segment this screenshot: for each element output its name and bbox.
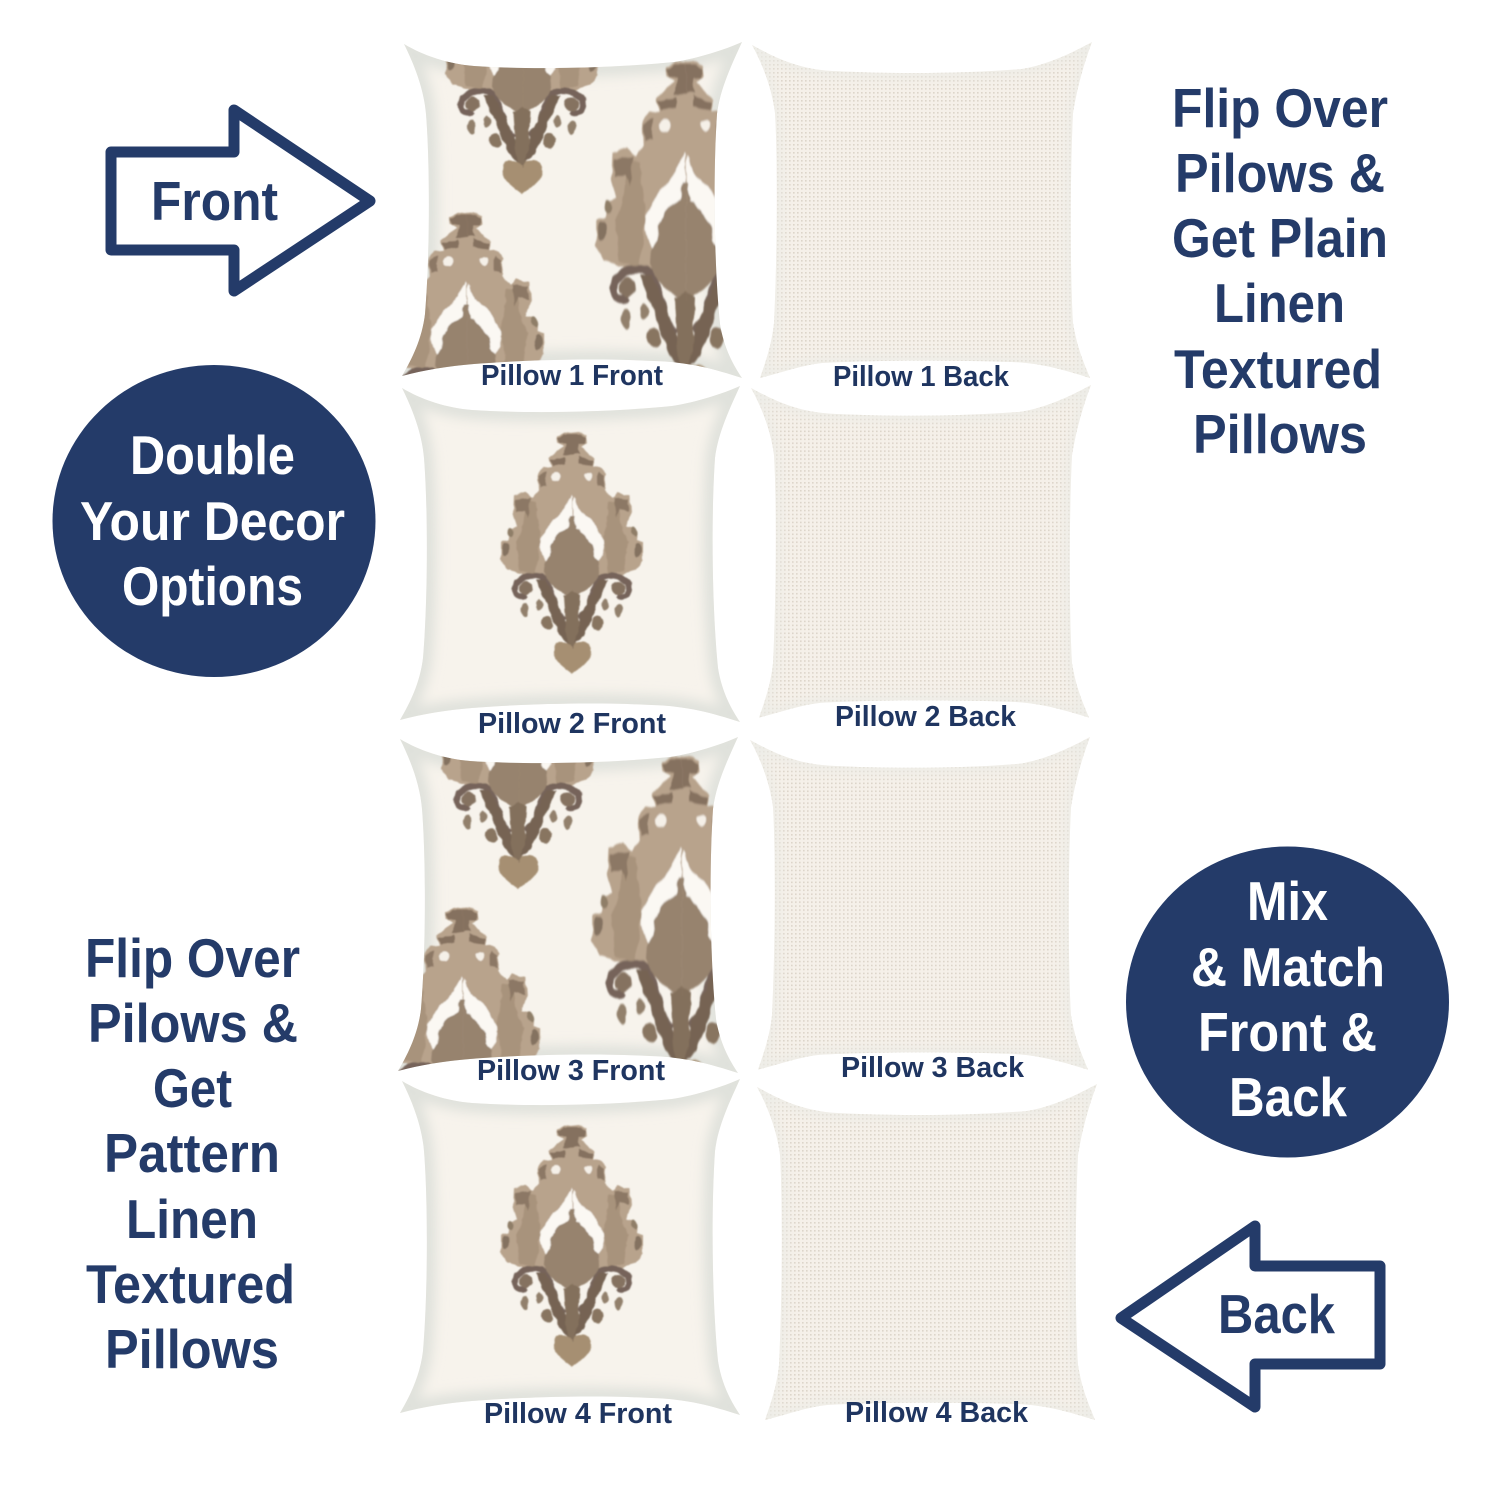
- label: pillow 3 back: Pillow 3 Back: [841, 1052, 1025, 1084]
- label: pillow 1 back: Pillow 1 Back: [833, 361, 1010, 393]
- badge: double your decor options: [52, 365, 376, 677]
- pillow 3 back: [750, 737, 1090, 1070]
- pillow 4 front: [400, 1079, 740, 1415]
- text block: flip over pattern: Textured: [86, 1253, 295, 1315]
- arrow: front: [111, 110, 370, 291]
- label: pillow 4 back: Pillow 4 Back: [845, 1397, 1029, 1429]
- label: pillow 3 front: Pillow 3 Front: [477, 1055, 665, 1087]
- badge: double your decor options: Your Decor: [80, 490, 345, 552]
- text block: flip over plain: Get Plain: [1172, 207, 1388, 269]
- badge: mix and match: & Match: [1191, 936, 1385, 998]
- pillow 3 front: [384, 635, 770, 1173]
- badge: mix and match: [1126, 846, 1449, 1158]
- text block: flip over plain: [1172, 77, 1388, 465]
- label: pillow 4 front: Pillow 4 Front: [484, 1398, 672, 1430]
- pillow 2 front: [400, 386, 740, 722]
- arrow label: front: Front: [151, 170, 278, 232]
- text block: flip over pattern: Flip Over: [85, 927, 300, 989]
- text block: flip over pattern: [85, 927, 300, 1380]
- badge: double your decor options: Options: [122, 555, 303, 617]
- pillow 2 back: [751, 385, 1091, 718]
- arrow label: back: Back: [1218, 1283, 1335, 1345]
- pillow 1 front: [388, 0, 774, 478]
- text block: flip over pattern: Get: [153, 1057, 232, 1119]
- badge: mix and match: Front &: [1198, 1001, 1377, 1063]
- arrow: back: [1121, 1226, 1380, 1407]
- text block: flip over plain: Pillows: [1193, 403, 1367, 465]
- text block: flip over plain: Flip Over: [1172, 77, 1388, 139]
- label: pillow 2 front: Pillow 2 Front: [478, 708, 666, 740]
- badge: double your decor options: Double: [130, 424, 295, 486]
- text block: flip over plain: Linen: [1214, 272, 1345, 334]
- badge: mix and match: Back: [1229, 1066, 1347, 1128]
- text block: flip over pattern: Pilows &: [88, 992, 298, 1054]
- text block: flip over pattern: Pillows: [105, 1318, 279, 1380]
- pillow 1 back: [752, 42, 1092, 378]
- text block: flip over plain: Pilows &: [1175, 142, 1385, 204]
- badge: mix and match: Mix: [1247, 870, 1328, 932]
- text block: flip over pattern: Pattern: [104, 1122, 280, 1184]
- label: pillow 2 back: Pillow 2 Back: [835, 701, 1017, 733]
- pillow 4 back: [757, 1084, 1097, 1420]
- text block: flip over plain: Textured: [1174, 338, 1382, 400]
- label: pillow 1 front: Pillow 1 Front: [481, 360, 663, 392]
- text block: flip over pattern: Linen: [126, 1188, 258, 1250]
